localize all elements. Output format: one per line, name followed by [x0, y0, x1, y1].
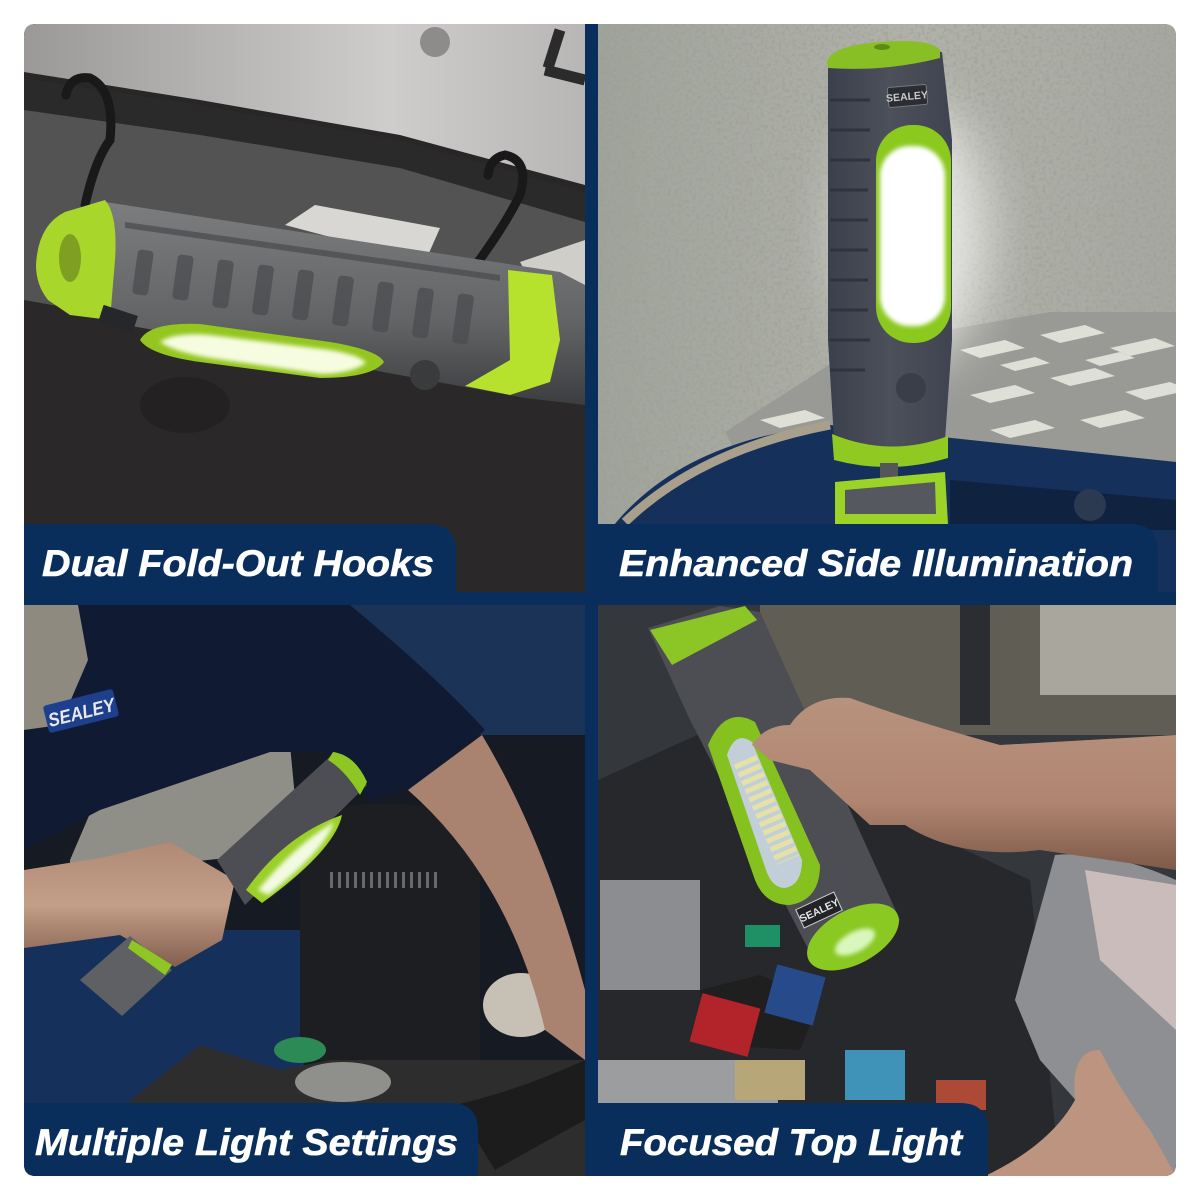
panel: enhanced side illumination [598, 24, 1190, 592]
work light, side LED on: SEALEY [886, 89, 929, 105]
caption: Multiple Light Settings: Multiple Light Settings [35, 1122, 458, 1163]
caption: Multiple Light Settings [24, 1103, 478, 1176]
panel: dual fold-out hooks [24, 24, 585, 592]
light glow [845, 105, 985, 365]
work light, LED array: SEALEY [798, 897, 841, 925]
hand and forearm gripping the light [752, 698, 1176, 1176]
workshop and engine bay background [598, 605, 1176, 1176]
mechanic in navy polo [24, 605, 485, 850]
blue car bodywork [598, 425, 1176, 592]
speckled wall background [598, 24, 1176, 524]
panel: focused top light [598, 605, 1176, 1176]
mechanic in navy polo: SEALEY [46, 695, 119, 732]
caption: Enhanced Side Illumination: Enhanced Side Illumination [619, 543, 1133, 584]
icon: fold-out hooks [66, 78, 523, 262]
divider: horizontal [24, 592, 1176, 605]
divider: vertical [585, 24, 598, 1176]
mechanic's arms [24, 735, 585, 1060]
work light, side LED on [827, 41, 952, 524]
panel: multiple light settings [24, 605, 585, 1176]
work light with wide beam [80, 752, 367, 1016]
work light held on hooks [36, 200, 585, 405]
caption: Dual Fold-Out Hooks [24, 524, 456, 592]
caption: Focused Top Light [598, 1103, 988, 1176]
caption: Enhanced Side Illumination [598, 524, 1158, 592]
engine bay background [24, 605, 585, 1176]
caption: Dual Fold-Out Hooks: Dual Fold-Out Hooks [42, 543, 434, 584]
car boot background [24, 24, 585, 592]
aluminium tread plate [725, 312, 1176, 462]
work light, LED array [648, 606, 910, 984]
caption: Focused Top Light: Focused Top Light [620, 1122, 964, 1163]
